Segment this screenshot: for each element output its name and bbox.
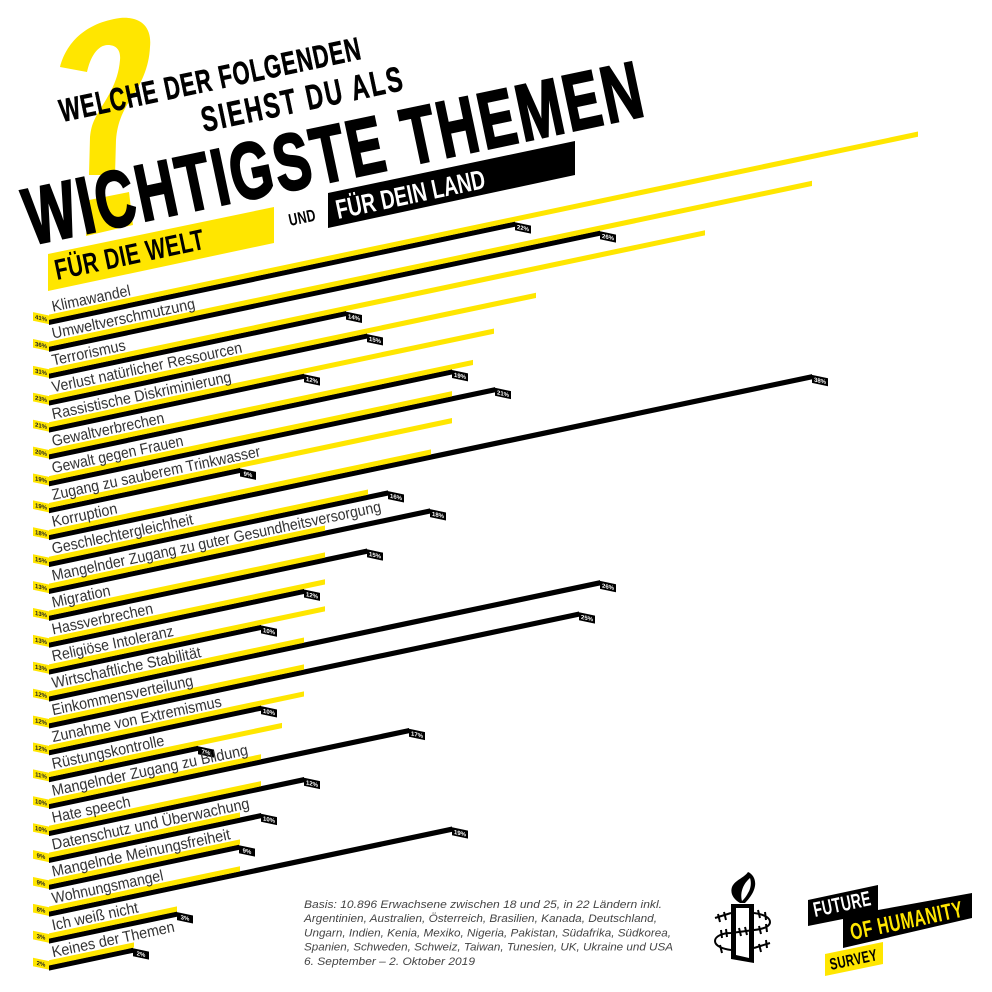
row: Rassistische Diskriminierung: Rassistische Diskriminierung xyxy=(50,369,233,423)
row: Ich weiß nicht xyxy=(33,899,193,944)
row: Datenschutz und Überwachung: 9% xyxy=(37,853,46,861)
row: Rassistische Diskriminierung xyxy=(33,328,494,433)
row: Ich weiß nicht: 3% xyxy=(37,934,46,942)
row: Mangelnde Meinungsfreiheit: 9% xyxy=(243,848,252,856)
row: Gewalt gegen Frauen xyxy=(33,387,511,486)
legend: für die Welt (yellow): FÜR DIE WELT xyxy=(52,223,208,287)
row: Zugang zu sauberem Trinkwasser: 19% xyxy=(35,503,48,512)
row: Gewaltverbrechen: 19% xyxy=(454,373,467,381)
row: Hate speech: 12% xyxy=(306,780,319,789)
row: Geschlechtergleichheit: Geschlechtergleichheit xyxy=(50,511,195,558)
row: Mangelnder Zugang zu guter Gesundheitsversorgung: Mangelnder Zugang zu guter Gesundheitsversorgung xyxy=(50,499,383,585)
row: Religiöse Intoleranz xyxy=(33,606,325,675)
row: Mangelnde Meinungsfreiheit: 9% xyxy=(37,880,46,888)
row: Verlust natürlicher Ressourcen xyxy=(33,293,536,406)
heading line 2: SIEHST DU ALS xyxy=(198,60,406,140)
row: Wohnungsmangel: 19% xyxy=(454,830,467,839)
row: Verlust natürlicher Ressourcen: 15% xyxy=(369,337,382,345)
row: Hate speech xyxy=(33,777,320,836)
row: Terrorismus: 31% xyxy=(35,369,48,377)
row: Gewaltverbrechen xyxy=(33,360,473,459)
text block: survey basis xyxy=(303,899,673,968)
logo: Future of Humanity Survey: OF HUMANITY xyxy=(848,897,965,946)
row: Geschlechtergleichheit: 15% xyxy=(35,557,48,566)
row: Verlust natürlicher Ressourcen: Verlust natürlicher Ressourcen xyxy=(50,340,244,396)
text block: survey basis: 6. September – 2. Oktober 2019 xyxy=(304,956,475,968)
row: Keines der Themen: 2% xyxy=(137,951,146,959)
row: Verlust natürlicher Ressourcen: 23% xyxy=(35,396,48,404)
legend: für dein Land (black) xyxy=(328,141,575,228)
row: Terrorismus xyxy=(33,230,705,379)
row: Einkommensverteilung: 12% xyxy=(35,718,48,727)
row: Rüstungskontrolle: 7% xyxy=(202,749,211,757)
legend: für die Welt (yellow) xyxy=(48,207,274,291)
row: Terrorismus: 14% xyxy=(348,314,361,323)
row: Korruption: 38% xyxy=(814,378,827,386)
row: Religiöse Intoleranz: 13% xyxy=(35,665,48,673)
row: Einkommensverteilung xyxy=(33,611,595,728)
row: Religiöse Intoleranz: Religiöse Intoleranz xyxy=(50,623,175,665)
logo: Future of Humanity Survey xyxy=(808,885,972,976)
row: Rassistische Diskriminierung: 12% xyxy=(306,377,319,386)
row: Wirtschaftliche Stabilität: Wirtschaftliche Stabilität xyxy=(50,644,203,692)
row: Keines der Themen xyxy=(33,919,176,971)
row: Keines der Themen: 2% xyxy=(37,961,46,969)
row: Umweltverschmutzung xyxy=(33,181,812,352)
row: Klimawandel: Klimawandel xyxy=(50,282,132,316)
row: Gewaltverbrechen: Gewaltverbrechen xyxy=(50,410,166,450)
heading line 1: WELCHE DER FOLGENDEN xyxy=(56,30,364,129)
row: Geschlechtergleichheit: 16% xyxy=(390,494,403,502)
row: Zunahme von Extremismus: 12% xyxy=(35,745,48,754)
row: Umweltverschmutzung: Umweltverschmutzung xyxy=(50,296,197,343)
logo: Future of Humanity Survey: SURVEY xyxy=(828,945,879,973)
row: Migration: 13% xyxy=(35,611,48,619)
row: Ich weiß nicht: 3% xyxy=(181,915,190,923)
logo: Future of Humanity Survey: FUTURE xyxy=(811,887,873,922)
row: Zunahme von Extremismus: Zunahme von Extremismus xyxy=(50,694,223,746)
row: Wohnungsmangel: Wohnungsmangel xyxy=(50,867,165,907)
text block: survey basis: Spanien, Schweden, Schweiz, Taiwan, Tunesien, UK, Ukraine und USA xyxy=(304,942,673,954)
row: Wirtschaftliche Stabilität xyxy=(33,580,616,702)
row: Mangelnder Zugang zu guter Gesundheitsversorgung: 18% xyxy=(432,512,445,520)
row: Einkommensverteilung: Einkommensverteilung xyxy=(50,673,195,719)
row: Hate speech: 10% xyxy=(35,826,48,835)
row: Rüstungskontrolle: Rüstungskontrolle xyxy=(50,733,166,773)
row: Keines der Themen: Keines der Themen xyxy=(50,919,176,961)
row: Wirtschaftliche Stabilität: 26% xyxy=(602,584,615,592)
icon: big yellow question mark xyxy=(60,18,150,236)
row: Korruption: Korruption xyxy=(50,500,119,531)
row: Mangelnder Zugang zu Bildung: 17% xyxy=(411,731,424,740)
row: Korruption xyxy=(33,374,828,540)
row: Mangelnder Zugang zu Bildung: 10% xyxy=(35,799,48,808)
row: Hassverbrechen: 13% xyxy=(35,638,48,646)
row: Einkommensverteilung: 25% xyxy=(581,615,594,623)
row: Datenschutz und Überwachung: Datenschutz und Überwachung xyxy=(50,794,251,854)
row: Rüstungskontrolle xyxy=(33,723,282,782)
row: Umweltverschmutzung: 26% xyxy=(602,234,615,242)
text block: survey basis: Ungarn, Indien, Kenia, Mexiko, Nigeria, Pakistan, Südafrika, Südkorea, xyxy=(304,927,671,939)
row: Mangelnder Zugang zu Bildung: Mangelnder Zugang zu Bildung xyxy=(50,742,250,800)
legend: für dein Land (black): FÜR DEIN LAND xyxy=(333,164,488,225)
row: Terrorismus: Terrorismus xyxy=(50,337,127,369)
row: Zunahme von Extremismus xyxy=(33,691,304,755)
row: Gewalt gegen Frauen: 19% xyxy=(35,476,48,485)
row: Datenschutz und Überwachung: 10% xyxy=(263,816,276,825)
legend connector: und: UND xyxy=(287,207,318,230)
row: Hate speech: Hate speech xyxy=(50,794,132,827)
row: Ich weiß nicht: Ich weiß nicht xyxy=(50,899,141,934)
row: Hassverbrechen: Hassverbrechen xyxy=(50,601,155,638)
row: Hassverbrechen: 12% xyxy=(306,592,319,601)
row: Hassverbrechen xyxy=(33,579,325,648)
row: Gewaltverbrechen: 20% xyxy=(35,449,48,458)
row: Rassistische Diskriminierung: 21% xyxy=(35,423,48,431)
row: Wohnungsmangel: 8% xyxy=(37,907,46,915)
row: Gewalt gegen Frauen: 21% xyxy=(497,390,510,399)
title: question xyxy=(16,30,650,262)
row: Mangelnder Zugang zu Bildung xyxy=(33,728,425,809)
row: Wirtschaftliche Stabilität: 12% xyxy=(35,692,48,700)
row: Mangelnder Zugang zu guter Gesundheitsversorgung: 13% xyxy=(35,584,48,593)
row: Rüstungskontrolle: 11% xyxy=(35,772,47,781)
row: Zunahme von Extremismus: 10% xyxy=(263,709,276,717)
row: Mangelnde Meinungsfreiheit: Mangelnde Meinungsfreiheit xyxy=(50,826,233,881)
text block: survey basis: Argentinien, Australien, Österreich, Brasilien, Kanada, Deutschland, xyxy=(303,913,657,925)
row: Umweltverschmutzung: 36% xyxy=(35,342,48,350)
bar chart: topics xyxy=(33,132,918,971)
row: Migration: Migration xyxy=(50,583,112,612)
row: Zugang zu sauberem Trinkwasser xyxy=(33,418,452,513)
row: Wohnungsmangel xyxy=(33,827,468,917)
row: Klimawandel xyxy=(33,132,918,325)
row: Migration xyxy=(33,549,383,621)
text block: survey basis: Basis: 10.896 Erwachsene zwischen 18 und 25, in 22 Ländern inkl. xyxy=(304,899,662,911)
row: Religiöse Intoleranz: 10% xyxy=(263,628,276,637)
row: Migration: 15% xyxy=(369,552,382,561)
row: Geschlechtergleichheit xyxy=(33,490,404,567)
row: Klimawandel: 22% xyxy=(517,225,530,233)
icon: Amnesty candle logo xyxy=(715,872,770,963)
row: Klimawandel: 41% xyxy=(35,315,48,324)
row: Zugang zu sauberem Trinkwasser: 9% xyxy=(244,472,253,479)
row: Zugang zu sauberem Trinkwasser: Zugang zu sauberem Trinkwasser xyxy=(50,443,262,504)
row: Gewalt gegen Frauen: Gewalt gegen Frauen xyxy=(50,433,185,477)
heading line 3: WICHTIGSTE THEMEN xyxy=(16,45,650,262)
row: Korruption: 18% xyxy=(35,530,48,539)
